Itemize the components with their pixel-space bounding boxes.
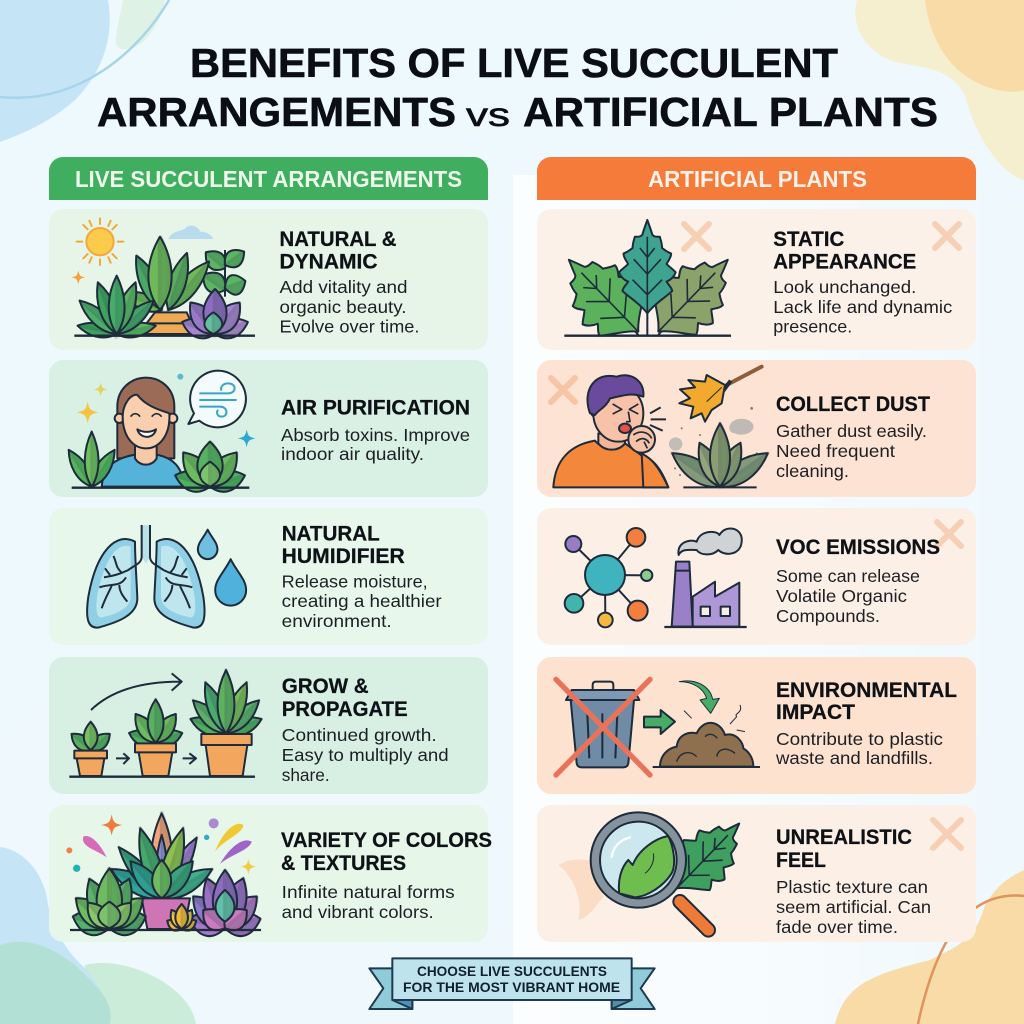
description: Lack life and dynamic [773, 297, 953, 317]
icon: x mark [937, 522, 961, 546]
description [282, 725, 449, 785]
description [775, 729, 943, 768]
heading: VARIETY OF COLORS [281, 829, 492, 852]
panel: unrealistic feel [537, 804, 976, 942]
description: and vibrant colors. [282, 902, 434, 922]
heading [776, 826, 912, 872]
icon: magnifying glass over leaf [558, 804, 760, 930]
panel: VOC emissions [537, 508, 976, 645]
description: Look unchanged. [773, 277, 916, 297]
description [773, 277, 953, 337]
description: Evolve over time. [280, 317, 420, 337]
panel: natural & dynamic [49, 209, 488, 350]
icon: sun, cloud and succulents [71, 218, 255, 343]
ribbon banner [369, 958, 655, 1009]
description [282, 572, 442, 631]
description: Easy to multiply and [282, 745, 449, 765]
description [280, 277, 420, 337]
heading: DYNAMIC [280, 251, 378, 274]
header: artificial plants: ARTIFICIAL PLANTS [648, 166, 867, 192]
heading: COLLECT DUST [776, 393, 930, 416]
panel: environmental impact [537, 657, 976, 794]
description: environment. [282, 611, 392, 631]
heading: GROW & [282, 675, 369, 698]
description: Gather dust easily. [776, 421, 927, 441]
heading: ENVIRONMENTAL [776, 679, 957, 702]
description: Contribute to plastic [776, 729, 943, 749]
panel: grow & propagate [49, 657, 488, 794]
description: Compounds. [776, 606, 880, 626]
heading [776, 679, 957, 724]
header: live succulent arrangements [49, 157, 488, 200]
heading: APPEARANCE [773, 251, 916, 274]
title: BENEFITS OF LIVE SUCCULENT [190, 40, 838, 86]
description: Some can release [776, 566, 920, 586]
heading: STATIC [773, 228, 844, 251]
icon: x mark [684, 224, 709, 249]
description: Continued growth. [282, 725, 437, 745]
description: presence. [773, 317, 852, 337]
description [776, 877, 931, 937]
description: Need frequent [776, 441, 895, 461]
title [97, 40, 938, 135]
description: Absorb toxins. Improve [281, 425, 470, 445]
heading: & TEXTURES [281, 852, 406, 875]
heading: IMPACT [776, 701, 855, 724]
icon: three artificial leaves [544, 220, 752, 356]
panel: variety of colors & textures [49, 805, 492, 942]
heading: AIR PURIFICATION [281, 396, 470, 419]
ribbon banner: FOR THE MOST VIBRANT HOME [403, 980, 620, 995]
description: organic beauty. [280, 297, 406, 317]
icon: colorful succulents [66, 813, 265, 940]
icon: x mark [935, 224, 959, 248]
panel: static appearance [537, 209, 976, 356]
description: Volatile Organic [776, 586, 907, 606]
heading: PROPAGATE [282, 698, 408, 721]
icon: molecule [565, 528, 652, 627]
description [282, 882, 455, 922]
description: fade over time. [776, 917, 898, 937]
panel: collect dust [537, 360, 976, 497]
heading [773, 228, 916, 274]
description: cleaning. [776, 461, 849, 481]
description: Release moisture, [282, 572, 428, 592]
heading: FEEL [776, 849, 826, 872]
icon: x mark [933, 820, 961, 848]
icon: coughing man, duster and dusty plant [553, 367, 774, 495]
title: vs [466, 96, 510, 133]
title: ARRANGEMENTS [97, 89, 456, 135]
heading [282, 523, 405, 568]
description: Plastic texture can [776, 877, 928, 897]
description: Infinite natural forms [282, 882, 455, 902]
heading [280, 228, 396, 274]
icon: x mark [551, 378, 575, 402]
title: ARTIFICIAL PLANTS [523, 89, 938, 135]
heading [281, 829, 492, 875]
header: live succulent arrangements: LIVE SUCCULENT ARRANGEMENTS [75, 166, 462, 192]
panel: natural humidifier [49, 508, 488, 645]
heading: HUMIDIFIER [282, 545, 405, 568]
header: artificial plants [537, 157, 976, 200]
heading: NATURAL [282, 523, 380, 546]
description: creating a healthier [282, 591, 442, 611]
description: indoor air quality. [281, 444, 424, 464]
icon: smiling woman with plants and air bubble [63, 371, 256, 496]
heading: NATURAL & [280, 228, 396, 251]
description: waste and landfills. [775, 748, 933, 768]
heading: VOC EMISSIONS [776, 536, 940, 559]
ribbon banner: CHOOSE LIVE SUCCULENTS [417, 964, 607, 979]
description: share. [282, 765, 330, 785]
icon: lungs and water drops [87, 525, 246, 628]
icon: polluting factory [664, 528, 747, 627]
description [776, 566, 920, 626]
heading: UNREALISTIC [776, 826, 912, 849]
description: Add vitality and [280, 277, 408, 297]
heading [282, 675, 408, 721]
description [776, 421, 927, 481]
description: seem artificial. Can [776, 897, 931, 917]
icon: crossed-out trash can and landfill [556, 679, 760, 775]
description [281, 425, 470, 464]
icon: three pots growing [67, 670, 265, 777]
panel: air purification [49, 360, 488, 497]
